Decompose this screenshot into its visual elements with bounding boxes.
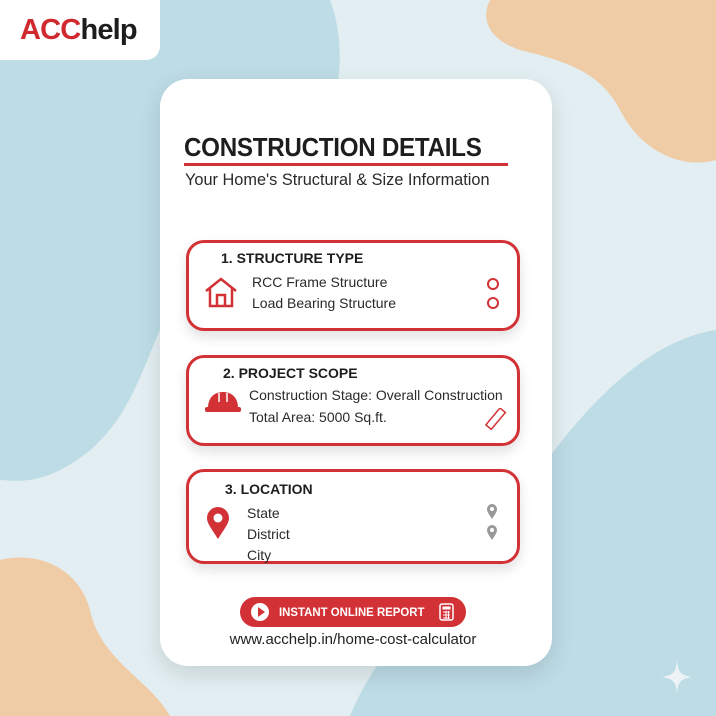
panel: location: District [247,526,290,542]
url: www.acchelp.in/home-cost-calculator [230,631,476,648]
panel: structure type [186,240,520,331]
title: CONSTRUCTION DETAILS [184,132,482,162]
icon: helmet [205,392,241,412]
panel: location [186,469,520,564]
panel: structure type: Load Bearing Structure [252,295,396,311]
panel: structure type: 1. STRUCTURE TYPE [221,250,363,266]
panel: project scope: Construction Stage: Overall Construction [249,387,503,403]
button: instant online report [240,597,466,627]
logo [0,0,160,60]
panel: location: 3. LOCATION [225,481,313,497]
subtitle: Your Home's Structural & Size Information [185,170,490,189]
panel: location: State [247,505,280,521]
panel: project scope: Total Area: 5000 Sq.ft. [249,409,387,425]
icon: ruler [485,408,506,430]
panel: location: City [247,547,271,563]
icon: house [205,278,237,308]
card [160,79,552,666]
icon: sparkle [662,661,692,694]
logo: ACChelp [20,14,137,46]
button: instant online report: INSTANT ONLINE REPORT [279,605,424,619]
panel: project scope: 2. PROJECT SCOPE [223,365,358,381]
icon: pin [207,507,229,539]
panel: project scope [186,355,520,446]
panel: structure type: RCC Frame Structure [252,274,387,290]
